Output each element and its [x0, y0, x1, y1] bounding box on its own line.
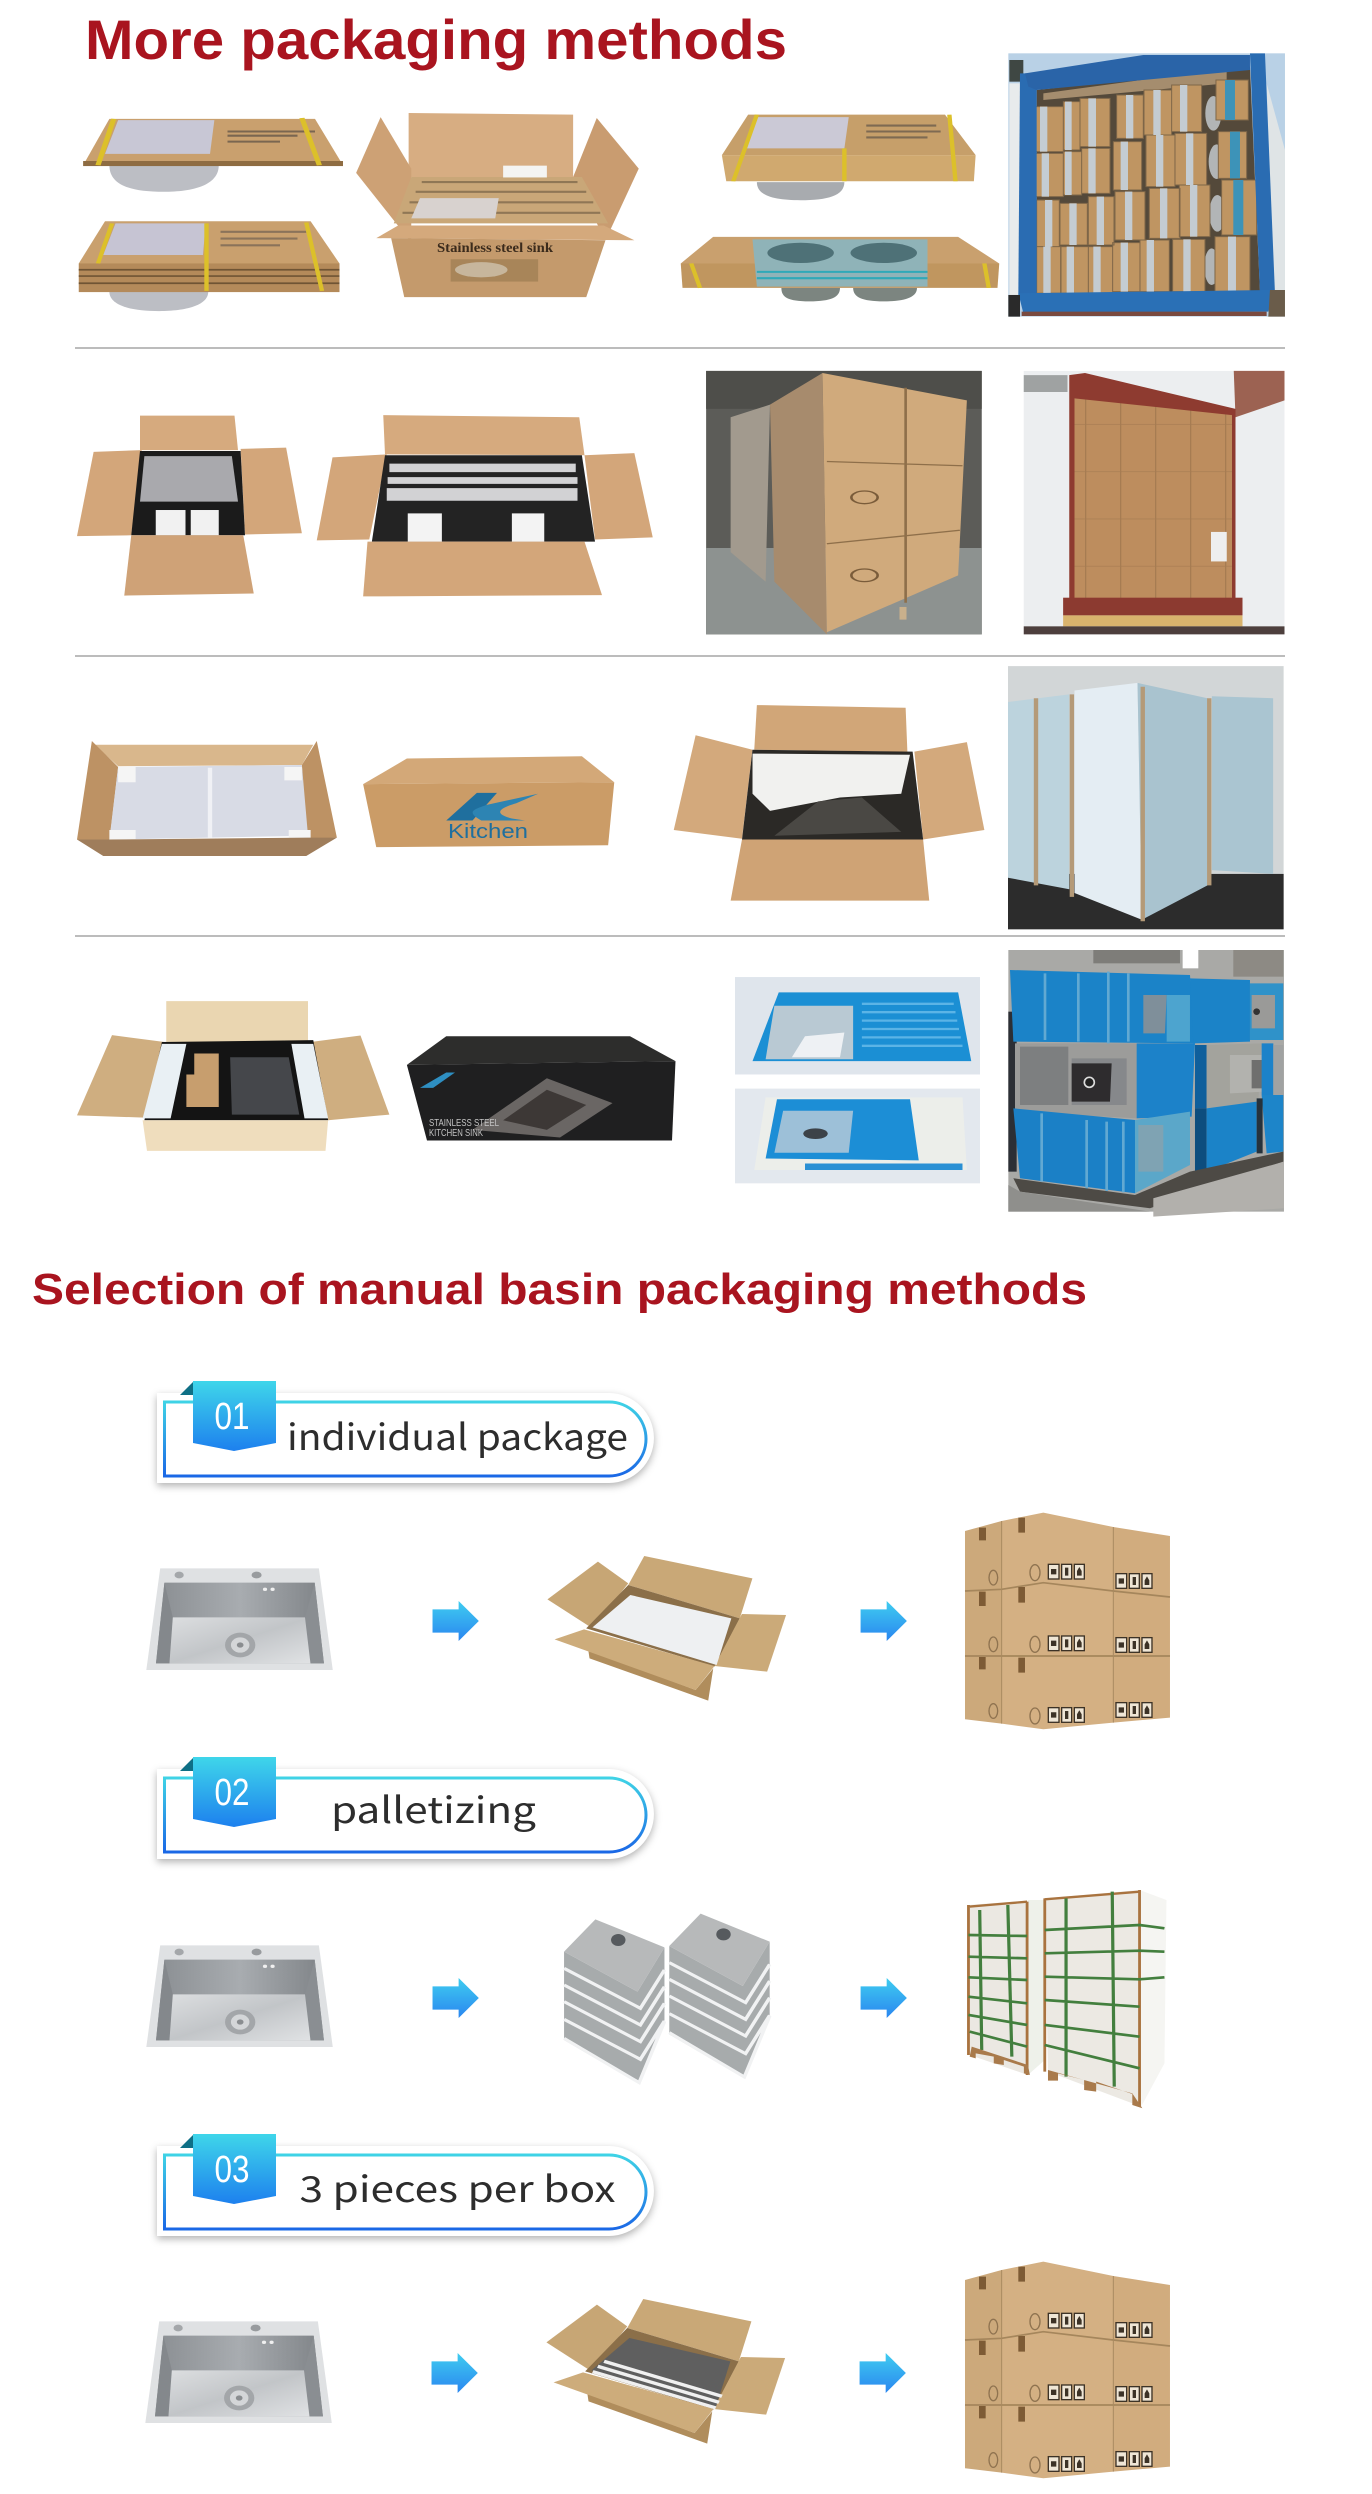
- banner: 01: 01: [214, 1396, 250, 1438]
- photo: open carton large sinks: [317, 415, 653, 596]
- arrow: second: [860, 2353, 906, 2393]
- arrow: second: [861, 1601, 907, 1641]
- icon: stacked sinks: [564, 1914, 770, 2084]
- photo: open box with black sink: [674, 705, 984, 901]
- icon: carton stack: [965, 2262, 1170, 2478]
- photo: blue film sink top: [735, 977, 980, 1074]
- photo: blue film sink in tray: [735, 1089, 980, 1183]
- photo: flat packed sink: [83, 118, 343, 192]
- photo: open carton small sink: [77, 416, 302, 596]
- banner: 02: palletizing: [331, 1782, 536, 1834]
- icon: sink: [146, 1568, 333, 1670]
- photo: blue container loaded: [1008, 53, 1285, 317]
- title: more packaging methods: More packaging methods: [85, 8, 787, 71]
- banner: 03: 3 pieces per box: [300, 2161, 616, 2213]
- banner: 01: individual package: [287, 1409, 628, 1461]
- photo: stacked flat packed sinks: [79, 221, 340, 311]
- photo: blue wrapped pallets: [1008, 950, 1284, 1217]
- icon: open carton with three sinks: [546, 2299, 785, 2444]
- icon: sink: [146, 1945, 333, 2047]
- panel: packaging photos rows three and four: [77, 666, 1284, 1183]
- icon: open carton with white film: [547, 1556, 786, 1701]
- arrow: first: [432, 2353, 478, 2393]
- photo: wrapped pallet of cartons: [706, 371, 982, 634]
- text: black box label: KITCHEN SINK: [429, 1128, 483, 1139]
- photo: single boxed sink with strap: [722, 115, 976, 200]
- icon: strapped pallets: [968, 1890, 1166, 2108]
- photo: open carton of sinks: [356, 113, 639, 297]
- photo: closed Kitchen carton: [363, 756, 614, 847]
- text: Kitchen logo: Kitchen: [448, 821, 528, 843]
- panel: 01 individual package: [146, 1381, 1170, 1729]
- banner: 01: [157, 1381, 654, 1483]
- arrow: first: [433, 1978, 479, 2018]
- arrow: first: [433, 1601, 479, 1641]
- photo: tall white wrapped pallets: [1008, 666, 1284, 929]
- banner: 02: [157, 1757, 654, 1859]
- banner: 02: 02: [214, 1772, 250, 1814]
- photo: double bowl sink in film: [681, 237, 999, 301]
- icon: carton stack: [965, 1513, 1170, 1729]
- photo: open box with white sheet: [77, 741, 337, 856]
- text: carton print: Stainless steel sink: [437, 241, 553, 256]
- panel: packaging photos rows one and two: [77, 113, 1284, 634]
- icon: sink: [145, 2321, 332, 2423]
- panel: 02 palletizing: [146, 1757, 1166, 2108]
- photo: black retail box: [407, 1036, 676, 1141]
- arrow: second: [861, 1978, 907, 2018]
- flow: sink to carton to stack: [146, 1556, 907, 1701]
- text: black box label: STAINLESS STEEL: [429, 1118, 499, 1129]
- divider rows: [75, 348, 1285, 936]
- text: black box label: [429, 1118, 499, 1139]
- photo: red container loaded: [1024, 371, 1284, 634]
- banner: 03: 03: [214, 2149, 250, 2191]
- panel: 03 three pieces per box: [145, 2134, 1170, 2478]
- photo: open box with black liner: [77, 1001, 389, 1151]
- heading: selection of manual basin packaging methods: Selection of manual basin packaging methods: [32, 1265, 1087, 1314]
- banner: 03: [157, 2134, 654, 2236]
